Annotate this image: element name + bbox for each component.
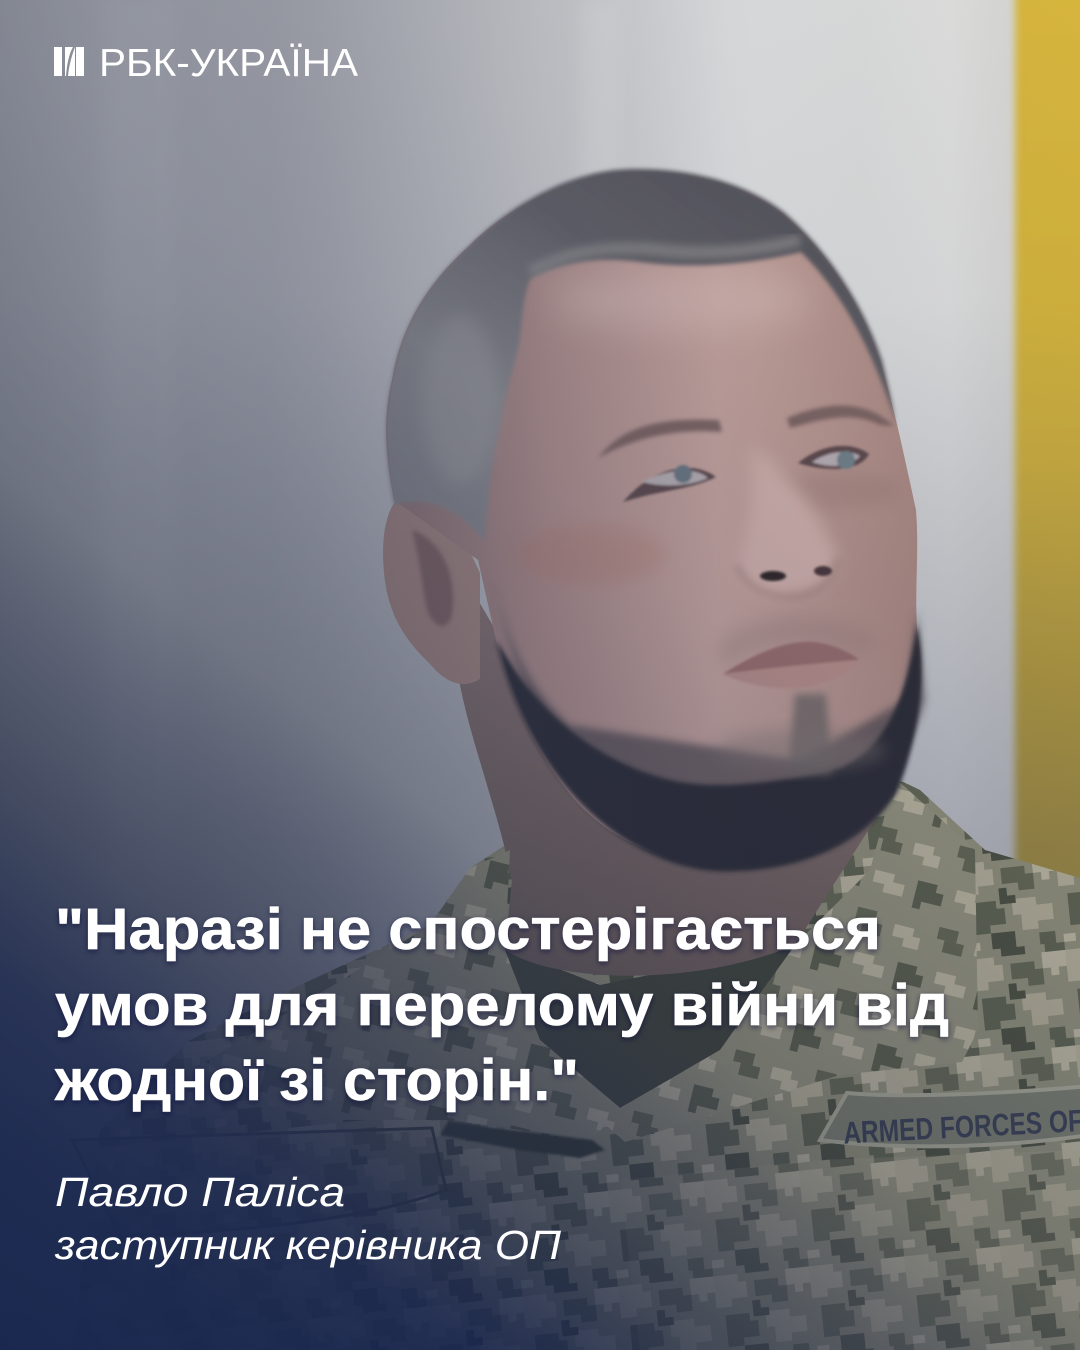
cheek blush (515, 525, 665, 585)
collar shadow gap (440, 1122, 605, 1158)
quote headline: умов для перелому війни від (55, 973, 949, 1038)
goatee (788, 694, 832, 775)
dark undershirt at collar (498, 945, 795, 1108)
grey temple highlight (422, 315, 498, 485)
chin stubble (715, 730, 885, 770)
mouth (723, 642, 859, 688)
attribution (54, 1169, 561, 1268)
quote headline (54, 897, 949, 1113)
eye-socket shadow (760, 472, 900, 508)
forehead highlight (550, 270, 810, 330)
left eyebrow (598, 420, 722, 458)
hair (386, 169, 896, 541)
beard stubble (492, 575, 925, 868)
right collar (600, 778, 978, 1142)
beard (496, 625, 921, 871)
uniform torso (72, 778, 1080, 1350)
right eyebrow (787, 405, 894, 428)
grey hairline band (530, 240, 800, 272)
quote headline: "Наразі не спостерігається (55, 897, 881, 962)
left collar (205, 850, 620, 1140)
logo: RBC-Ukraine (54, 42, 358, 85)
chest shirt tone patches (620, 1150, 1080, 1350)
attribution: Павло Паліса (55, 1169, 345, 1215)
attribution: заступник керівника ОП (54, 1222, 561, 1268)
logo wordmark: РБК-УКРАЇНА (99, 42, 358, 85)
logo icon (54, 47, 84, 76)
left eye (623, 465, 716, 502)
moustache stubble (720, 616, 880, 668)
head and face (386, 172, 921, 867)
nose (737, 445, 838, 597)
ear (383, 497, 480, 684)
quote headline: жодної зі сторін." (54, 1048, 579, 1113)
pocket flap outline (72, 1128, 446, 1236)
right eye (798, 446, 869, 469)
neck (459, 600, 880, 976)
